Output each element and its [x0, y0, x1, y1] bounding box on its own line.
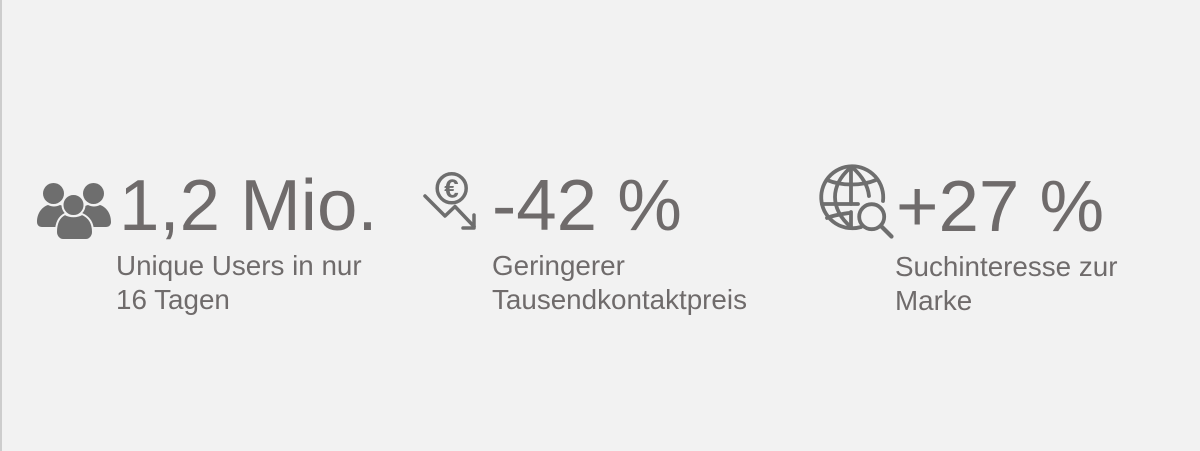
label: unique users	[116, 250, 362, 315]
big number: -42 %: -42 %	[492, 165, 682, 246]
icon: euro coin with falling arrow: €	[444, 174, 459, 204]
label: Tausendkontaktpreis: Tausendkontaktpreis	[492, 284, 747, 315]
stat: unique users	[37, 165, 378, 315]
icon: globe with magnifier	[819, 164, 894, 239]
stat: search interest	[819, 164, 1118, 316]
label: Tausendkontaktpreis: Geringerer	[492, 250, 625, 281]
label: Suchinteresse	[895, 251, 1118, 316]
label: Tausendkontaktpreis	[492, 250, 747, 315]
stat: CPM decrease	[423, 165, 747, 315]
label: unique users: 16 Tagen	[116, 284, 230, 315]
label: Suchinteresse: Suchinteresse zur	[895, 251, 1117, 282]
big number: 1,2 Mio.: 1,2 Mio.	[119, 165, 378, 246]
icon: euro coin with falling arrow	[423, 172, 476, 230]
label: Suchinteresse: Marke	[895, 285, 972, 316]
icon: group of people	[37, 183, 111, 239]
big number: +27 %: +27 %	[896, 166, 1104, 247]
label: unique users: Unique Users in nur	[116, 250, 362, 281]
